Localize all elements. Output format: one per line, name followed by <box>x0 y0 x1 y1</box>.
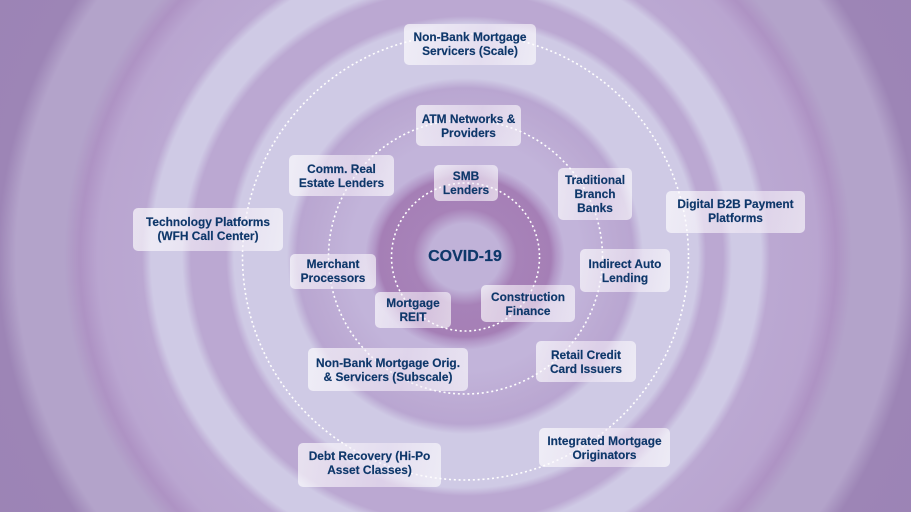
center label: COVID-19: COVID-19 <box>428 248 502 265</box>
label: Debt Recovery (Hi-Po Asset Classes) <box>298 443 441 487</box>
label: ATM Networks & Providers <box>416 105 521 146</box>
label: Indirect Auto Lending <box>580 249 670 292</box>
label: Integrated Mortgage Originators: Integrated Mortgage <box>547 434 662 448</box>
label: Construction Finance <box>481 285 575 322</box>
label: Retail Credit Card Issuers <box>536 341 636 382</box>
label: Traditional Branch Banks: Traditional <box>565 173 625 187</box>
label: Indirect Auto Lending: Lending <box>602 270 648 284</box>
label: Mortgage REIT <box>375 292 451 328</box>
label: Merchant Processors: Processors <box>301 270 365 284</box>
label: Retail Credit Card Issuers: Retail Credit <box>551 348 621 362</box>
label: Digital B2B Payment Platforms: Digital B2B Payment <box>677 197 794 211</box>
label: Comm. Real Estate Lenders <box>289 155 394 196</box>
label: Debt Recovery (Hi-Po Asset Classes): Asset Classes) <box>327 463 412 477</box>
label: Comm. Real Estate Lenders: Comm. Real <box>307 162 376 176</box>
label: Technology Platforms (WFH Call Center): (WFH Call Center) <box>157 228 259 242</box>
label: Traditional Branch Banks <box>558 168 632 220</box>
label: Traditional Branch Banks: Banks <box>577 201 613 215</box>
label: Debt Recovery (Hi-Po Asset Classes): Debt Recovery (Hi-Po <box>309 449 430 463</box>
label: Non-Bank Mortgage Servicers (Scale) <box>404 24 536 65</box>
label: SMB Lenders: SMB <box>453 169 479 183</box>
label: ATM Networks & Providers: Providers <box>441 126 496 140</box>
label: Retail Credit Card Issuers: Card Issuers <box>550 362 622 376</box>
label: Integrated Mortgage Originators <box>539 428 670 467</box>
label: Traditional Branch Banks: Branch <box>575 187 615 201</box>
label: Construction Finance: Construction <box>491 290 565 304</box>
label: Mortgage REIT: Mortgage <box>386 296 440 310</box>
label: Construction Finance: Finance <box>506 304 550 318</box>
label: Merchant Processors <box>290 254 376 289</box>
label: Indirect Auto Lending: Indirect Auto <box>589 256 661 270</box>
label: Non-Bank Mortgage Servicers (Scale): Servicers (Scale) <box>422 44 518 58</box>
label: Integrated Mortgage Originators: Originators <box>572 448 637 462</box>
label: Non-Bank Mortgage Servicers (Scale): Non-Bank Mortgage <box>414 30 526 44</box>
label: Digital B2B Payment Platforms <box>666 191 805 233</box>
label: Technology Platforms (WFH Call Center): Technology Platforms <box>146 214 270 228</box>
label: Digital B2B Payment Platforms: Platforms <box>708 211 763 225</box>
label: Non-Bank Mortgage Orig. & Servicers (Subscale): Non-Bank Mortgage Orig. <box>316 356 460 370</box>
label: Technology Platforms (WFH Call Center) <box>133 208 283 251</box>
label: ATM Networks & Providers: ATM Networks & <box>422 112 515 126</box>
label: Mortgage REIT: REIT <box>399 310 427 324</box>
label: SMB Lenders <box>434 165 498 201</box>
label: Non-Bank Mortgage Orig. & Servicers (Subscale) <box>308 348 468 391</box>
label: Non-Bank Mortgage Orig. & Servicers (Subscale): & Servicers (Subscale) <box>324 370 452 384</box>
label: SMB Lenders: Lenders <box>443 183 489 197</box>
label: Comm. Real Estate Lenders: Estate Lenders <box>299 176 384 190</box>
label: Merchant Processors: Merchant <box>307 256 359 270</box>
